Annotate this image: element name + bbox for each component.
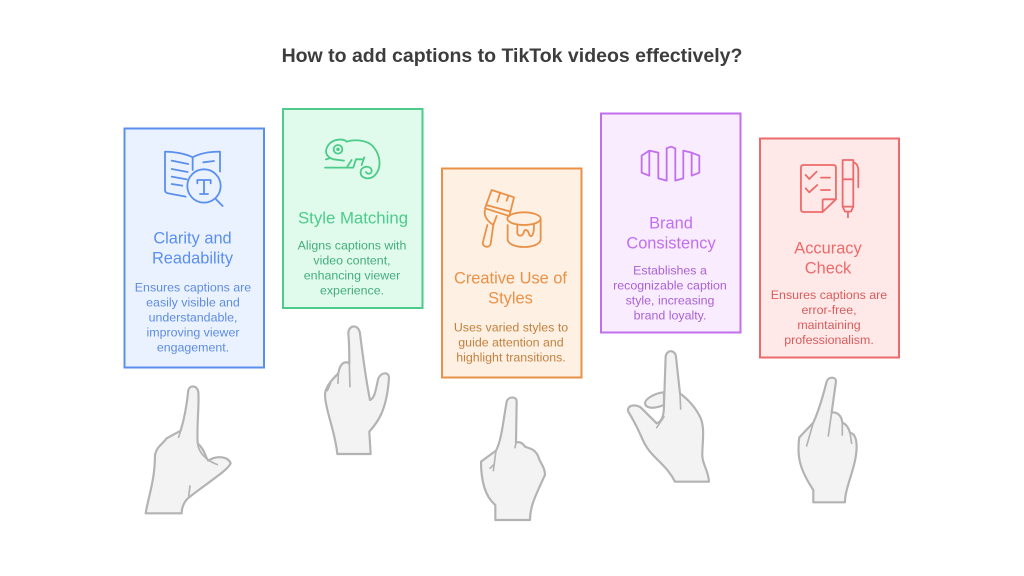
text: creative description: guide attention and xyxy=(458,336,564,350)
panel: brand consistency xyxy=(601,114,740,332)
title: How to add captions to TikTok videos effectively? xyxy=(282,45,742,67)
heading: brand consistency xyxy=(626,214,716,252)
text: accuracy description: Ensures captions are xyxy=(771,288,887,302)
heading: style matching: Style Matching xyxy=(298,208,408,228)
panel: creative use of styles xyxy=(442,168,582,378)
icon: paint brush and can xyxy=(483,190,541,247)
heading: creative use of styles xyxy=(454,270,567,308)
icon: checklist and pen xyxy=(801,160,858,217)
text: creative description xyxy=(454,320,568,364)
text: brand description: brand loyalty. xyxy=(634,308,706,322)
text: creative description: Uses varied styles to xyxy=(454,320,568,334)
text: clarity description: understandable, xyxy=(149,310,237,324)
text: style description: video content, xyxy=(313,254,391,268)
text: clarity description: Ensures captions are xyxy=(135,280,251,294)
icon: hand 1 xyxy=(146,386,231,513)
icon: hand 5 xyxy=(798,378,857,502)
text: style description: enhancing viewer xyxy=(304,268,400,282)
heading: brand consistency: Brand xyxy=(649,214,693,232)
heading: clarity and readability xyxy=(152,230,234,268)
text: brand description xyxy=(613,264,727,322)
icon: hand 3 xyxy=(481,397,545,520)
text: clarity description: improving viewer xyxy=(147,326,239,340)
heading: accuracy check: Accuracy xyxy=(794,240,863,258)
heading: creative use of styles: Creative Use of xyxy=(454,270,567,288)
heading: accuracy check: Check xyxy=(805,260,852,278)
icon: book with magnifier xyxy=(165,152,223,206)
panel: style matching xyxy=(283,109,422,308)
heading: brand consistency: Consistency xyxy=(626,234,716,252)
panel: accuracy check xyxy=(760,138,899,358)
text: style description: Aligns captions with xyxy=(298,238,407,252)
heading: clarity and readability: Readability xyxy=(152,250,234,268)
text: accuracy description: error-free, xyxy=(801,303,857,317)
text: accuracy description: professionalism. xyxy=(784,333,874,347)
icon: hand 4 xyxy=(628,351,709,482)
heading: accuracy check xyxy=(794,240,863,278)
text: brand description: recognizable caption xyxy=(613,278,727,292)
panel: clarity and readability xyxy=(124,128,264,368)
heading: clarity and readability: Clarity and xyxy=(153,230,232,248)
text: style description xyxy=(298,238,407,298)
icon: wave bars xyxy=(642,147,699,181)
icon: hand 2 xyxy=(325,326,389,454)
text: brand description: style, increasing xyxy=(626,294,715,308)
text: style description: experience. xyxy=(320,284,384,298)
heading: creative use of styles: Styles xyxy=(488,290,533,308)
text: accuracy description: maintaining xyxy=(797,318,861,332)
text: creative description: highlight transitions. xyxy=(456,350,566,364)
text: clarity description: engagement. xyxy=(157,340,229,354)
text: brand description: Establishes a xyxy=(633,264,707,278)
text: clarity description xyxy=(135,280,251,354)
icon: chameleon xyxy=(325,140,380,178)
text: clarity description: easily visible and xyxy=(146,296,240,310)
text: accuracy description xyxy=(771,288,887,347)
